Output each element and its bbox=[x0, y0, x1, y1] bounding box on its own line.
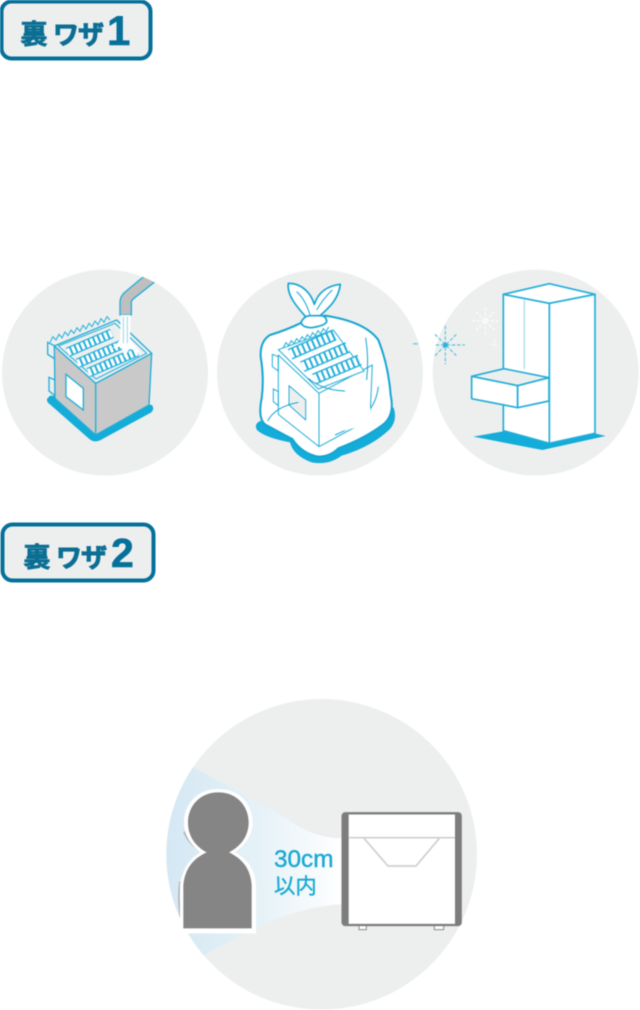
water stream bbox=[113, 315, 142, 358]
tray inside bag bbox=[278, 355, 372, 447]
tabs inside bag bbox=[272, 354, 278, 406]
panel: store in freezer bbox=[433, 270, 639, 476]
back teeth bbox=[50, 317, 110, 342]
badge: 裏ワザ1 bbox=[2, 2, 150, 58]
grille rows bbox=[68, 333, 137, 373]
panel: pour water on ice tray bbox=[2, 270, 208, 476]
blue shadow under bag bbox=[256, 408, 395, 463]
panel: wrap ice tray in bag bbox=[217, 270, 423, 476]
badge: 裏ワザ1: 裏 bbox=[20, 20, 48, 50]
small dash mark bbox=[413, 343, 418, 345]
cold air cone bbox=[160, 767, 343, 955]
badge: 裏ワザ1: 1 bbox=[107, 7, 130, 54]
blue sparkle star bbox=[443, 342, 448, 348]
teeth inside bag bbox=[283, 327, 329, 348]
badge: 裏ワザ2: 2 bbox=[111, 530, 134, 576]
badge: 裏ワザ2: ワザ bbox=[56, 543, 107, 573]
freezer front bbox=[343, 813, 461, 930]
fold highlight bbox=[337, 398, 372, 432]
side tabs bbox=[48, 342, 55, 396]
circle background bbox=[2, 270, 208, 476]
label: 30cm以内: 30cm bbox=[274, 846, 333, 873]
bag knot and ears bbox=[288, 283, 340, 328]
ice tray box bbox=[54, 320, 152, 435]
blue base shadow bbox=[47, 396, 153, 441]
badge: 裏ワザ1: ワザ bbox=[53, 20, 104, 50]
window bbox=[66, 374, 83, 410]
grille inside bag bbox=[278, 330, 364, 389]
badge: 裏ワザ2 bbox=[2, 524, 154, 580]
open drawer bbox=[472, 369, 549, 408]
person bbox=[180, 789, 256, 933]
floor shadow bbox=[473, 431, 606, 450]
label: 30cm以内 bbox=[274, 846, 333, 899]
motion arcs bbox=[179, 832, 199, 932]
circle background bbox=[166, 699, 477, 1010]
badge: 裏ワザ2: 裏 bbox=[24, 543, 50, 573]
hose bbox=[120, 275, 157, 315]
circle background bbox=[217, 270, 423, 476]
white sparkles bbox=[472, 308, 499, 350]
bag folds bbox=[268, 338, 378, 435]
panel: stay within 30cm of freezer bbox=[160, 699, 477, 1010]
freezer body bbox=[503, 284, 595, 443]
label: 30cm以内: 以内 bbox=[274, 875, 317, 899]
blue sparkle bbox=[435, 326, 465, 364]
circle background bbox=[433, 270, 639, 476]
plastic bag bbox=[260, 316, 392, 457]
door line bbox=[523, 299, 526, 369]
